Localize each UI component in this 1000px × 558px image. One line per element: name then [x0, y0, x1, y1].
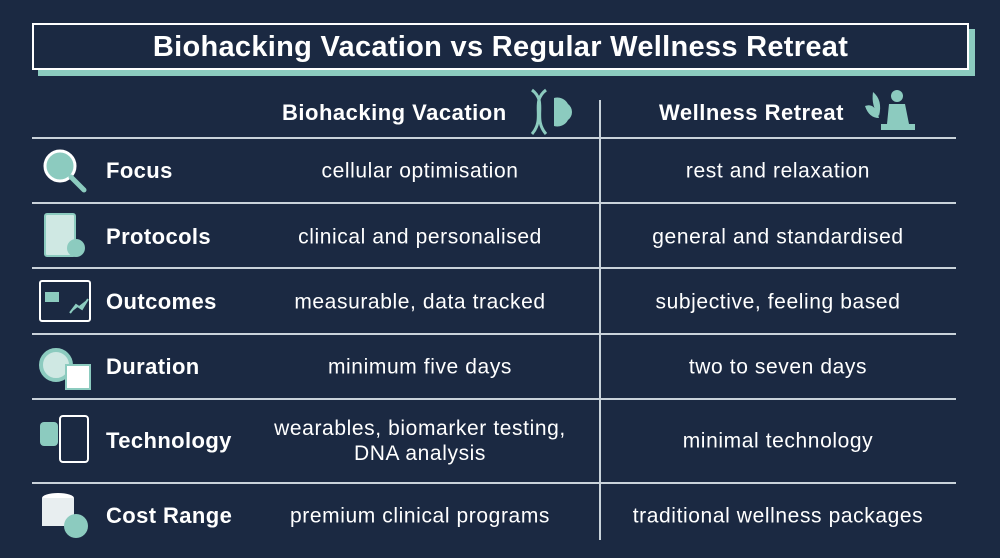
text: cellular optimisation: [321, 160, 519, 182]
text: premium clinical programs: [290, 504, 550, 528]
text: Protocols: [106, 224, 211, 249]
icon: magnifier: [44, 150, 86, 192]
row: Cost Range: [42, 493, 923, 538]
divider: [599, 100, 601, 540]
row: Protocols: [44, 213, 904, 257]
row: Duration: [39, 348, 867, 390]
icon: clock calendar: [39, 348, 91, 390]
icon: DNA brain: [531, 88, 572, 135]
text: general and standardised: [652, 226, 904, 248]
text: measurable, data tracked: [294, 290, 546, 314]
icon: meditation: [865, 90, 915, 130]
header: Wellness Retreat: Wellness Retreat: [659, 100, 844, 125]
text: Focus: [106, 158, 173, 183]
header: Biohacking Vacation: Biohacking Vacation: [282, 100, 507, 125]
text: traditional wellness packages: [633, 504, 923, 528]
text: minimum five days: [328, 356, 512, 378]
icon: clipboard: [44, 213, 85, 257]
text: rest and relaxation: [686, 160, 870, 182]
text: subjective, feeling based: [656, 290, 900, 314]
icon: coins: [42, 493, 88, 538]
row: Focus: [44, 150, 870, 192]
row: Outcomes: [39, 280, 900, 322]
title shadow: [38, 29, 975, 76]
text: Cost Range: [106, 503, 232, 528]
row: Technology: [40, 415, 873, 465]
text: minimal technology: [683, 430, 873, 452]
text: Duration: [106, 354, 200, 379]
title: Biohacking Vacation vs Regular Wellness Retreat: [153, 31, 848, 63]
title: [32, 23, 969, 70]
text: wearables, biomarker testing,: [274, 417, 566, 440]
text: clinical and personalised: [298, 226, 542, 248]
text: Outcomes: [106, 289, 217, 314]
text: two to seven days: [689, 356, 867, 378]
text: DNA analysis: [354, 442, 486, 465]
icon: dashboard: [39, 280, 91, 322]
icon: watch tablet: [40, 415, 89, 463]
text: Technology: [106, 428, 232, 453]
